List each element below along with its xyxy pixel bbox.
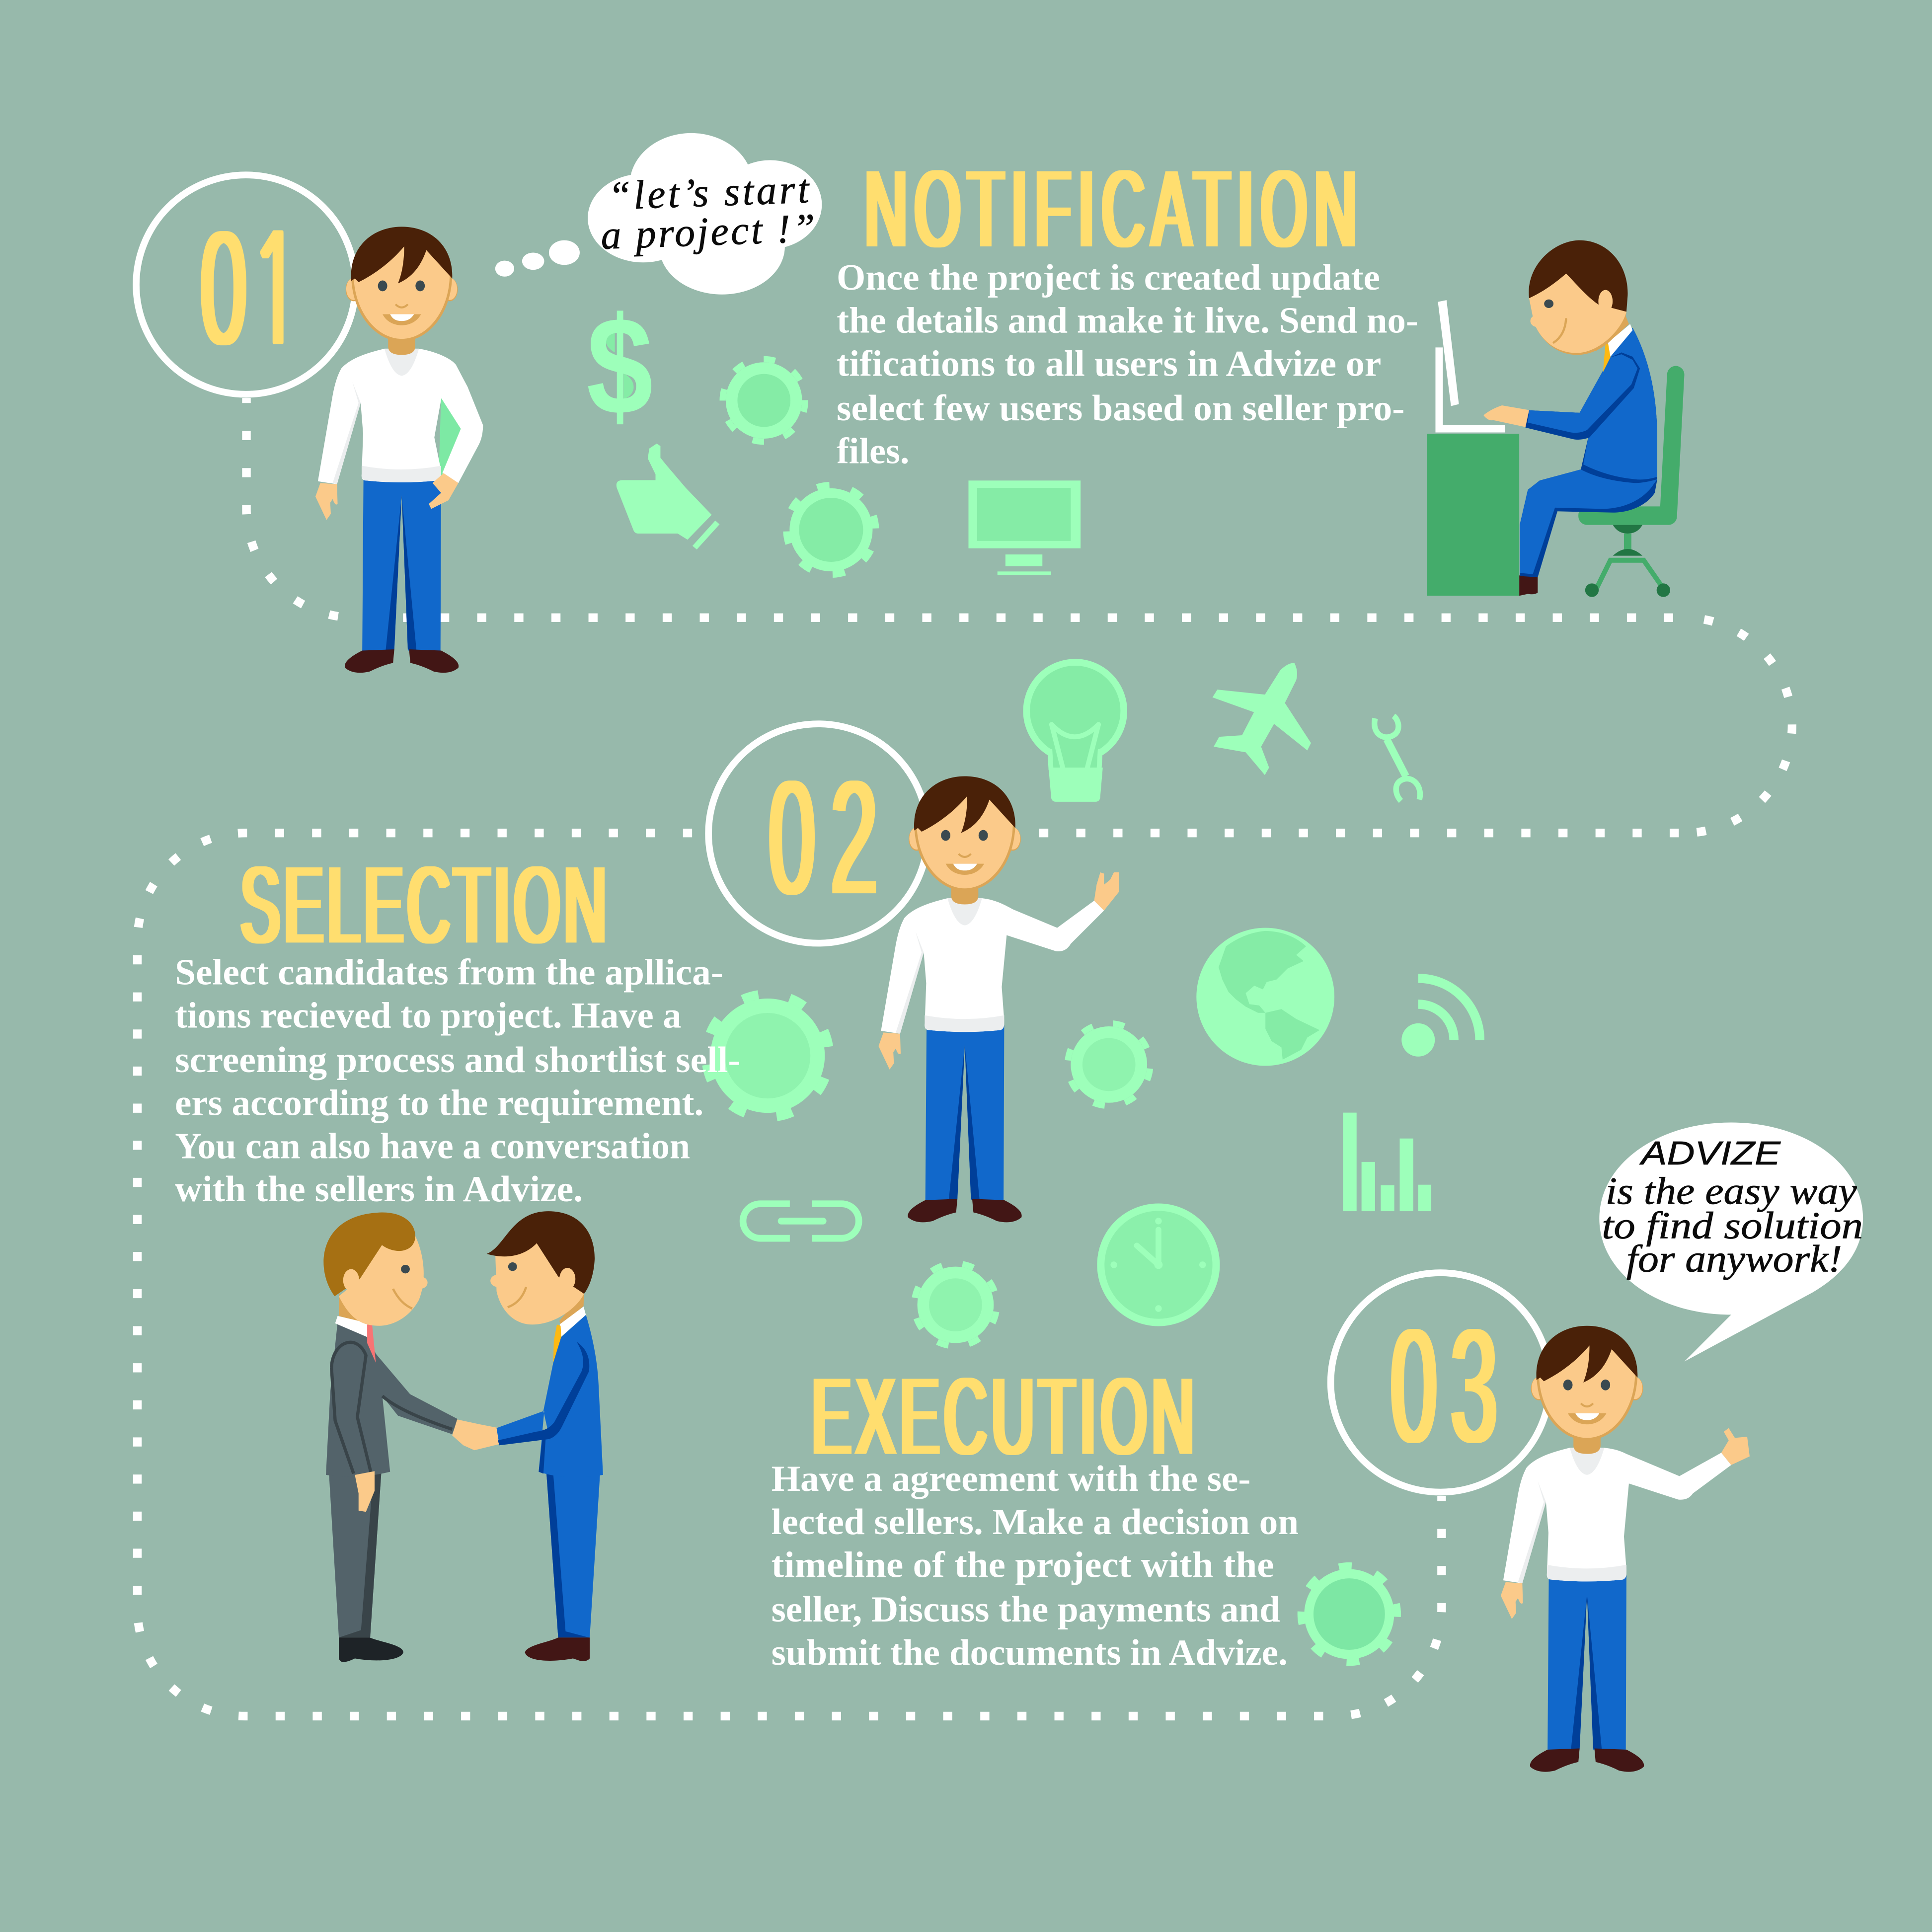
laptop	[1435, 300, 1505, 433]
blue man's neck	[559, 1291, 584, 1326]
collar	[1570, 1448, 1604, 1475]
icon: gear lower right	[1292, 1557, 1406, 1671]
text: execution body: submit the documents in Advize.	[772, 1632, 1288, 1673]
yellow tie	[553, 1324, 561, 1363]
icon: chain link	[743, 1204, 859, 1238]
right arm	[419, 349, 483, 483]
thought bubble	[495, 133, 822, 295]
balloon line 1: is the easy way	[1606, 1169, 1857, 1212]
speech bubble	[1599, 1122, 1863, 1362]
cloud quote second line: a project !”	[600, 205, 816, 258]
balloon	[1599, 1122, 1863, 1362]
icon: gear bottom	[908, 1257, 1004, 1353]
man in grey suit	[323, 1213, 458, 1662]
text: execution body: seller, Discuss the payments and	[772, 1589, 1280, 1630]
number 03: 03	[1391, 1296, 1497, 1476]
left hand	[315, 483, 338, 520]
text: selection body: ers according to the requirement.	[175, 1083, 703, 1124]
grey man's collar	[335, 1316, 369, 1338]
neck	[951, 880, 978, 904]
jeans shadow	[1571, 1594, 1602, 1750]
neck	[1573, 1429, 1601, 1454]
hand	[1483, 405, 1530, 428]
number 02: 02	[769, 748, 877, 927]
text: execution body: timeline of the project with the	[772, 1545, 1274, 1586]
left hand	[1501, 1582, 1523, 1619]
blue jacket	[497, 1314, 603, 1477]
shoes	[1530, 1748, 1644, 1772]
icon: clock	[1101, 1207, 1216, 1322]
icon: gear left large	[687, 975, 849, 1137]
shoes	[345, 649, 459, 673]
icon: light bulb	[1026, 662, 1124, 802]
black shoe	[339, 1637, 403, 1662]
neck	[1596, 311, 1629, 351]
grey trousers shadow	[339, 1473, 381, 1637]
grey man's smile	[393, 1289, 412, 1309]
eye	[1544, 300, 1553, 308]
cloud	[588, 133, 822, 295]
head	[909, 776, 1021, 891]
man in blue suit	[452, 1211, 603, 1661]
balloon line 3: for anywork!	[1626, 1237, 1842, 1280]
blue trousers	[546, 1473, 600, 1637]
blue jacket shading	[498, 1342, 589, 1473]
sweater shading	[896, 931, 1004, 1034]
jeans	[1547, 1575, 1626, 1750]
step circle 03	[1331, 1273, 1550, 1492]
icon: monitor	[968, 480, 1081, 575]
dark hair	[487, 1211, 595, 1294]
book under arm	[439, 397, 462, 475]
right hand	[429, 473, 459, 509]
text: notification body: files.	[837, 431, 909, 472]
text: selection body: with the sellers in Advize.	[175, 1169, 583, 1210]
brown hair	[323, 1213, 415, 1296]
step circle 01	[136, 175, 356, 394]
grey man's eye	[401, 1265, 410, 1273]
text: execution body	[772, 1459, 1299, 1673]
icon: gear top	[723, 359, 805, 442]
icon: airplane	[1213, 663, 1311, 775]
grey jacket shading	[331, 1342, 452, 1473]
desk	[1427, 434, 1519, 596]
sweater shading	[1518, 1481, 1626, 1583]
step circle 02	[708, 724, 928, 943]
sweater	[881, 898, 1013, 1034]
icon: gear middle	[775, 473, 887, 586]
blue man's collar	[560, 1307, 586, 1338]
grey man's lower hand	[355, 1471, 375, 1512]
raised arm	[1604, 1448, 1731, 1500]
text: selection body: You can also have a conversation	[175, 1126, 690, 1166]
text: notification body	[837, 257, 1418, 472]
ear	[1598, 290, 1613, 312]
brown shoe	[525, 1637, 590, 1661]
grey man's neck	[339, 1294, 385, 1324]
text: notification body: tifications to all users in Advize or	[837, 343, 1381, 384]
thought dots	[495, 240, 580, 277]
red tie	[367, 1324, 376, 1363]
icon: thumbs up	[617, 444, 719, 549]
collar	[1608, 324, 1632, 357]
trousers	[1520, 469, 1657, 577]
raised arm	[982, 898, 1104, 951]
character: man standing, step 01	[315, 227, 483, 673]
text: selection body: tions recieved to project. Have a	[175, 996, 682, 1036]
balloon heading: ADVIZE	[1639, 1135, 1781, 1172]
thumbs up hand	[1721, 1428, 1750, 1465]
icon: globe	[1196, 928, 1334, 1066]
sweater	[318, 349, 450, 484]
text: notification body: Once the project is created update	[837, 257, 1380, 298]
raised hand	[1094, 872, 1119, 911]
blue man's eye	[508, 1262, 517, 1271]
blue man's nose	[490, 1275, 505, 1287]
text: execution body: Have a agreement with the se-	[772, 1459, 1250, 1499]
smile	[1554, 319, 1566, 343]
icon: dollar sign: $	[587, 288, 653, 444]
icon: gear centre	[1064, 1019, 1155, 1110]
nose	[1530, 315, 1545, 327]
sweater	[1503, 1448, 1631, 1583]
blue man's smile	[508, 1287, 526, 1308]
character: man at desk	[1427, 240, 1677, 597]
heading: execution: EXECUTION	[812, 1356, 1194, 1477]
text: notification body: the details and make it live. Send no-	[837, 301, 1418, 341]
heading: selection: SELECTION	[240, 845, 607, 966]
character: man presenting, step 02	[878, 776, 1119, 1222]
shoe	[1519, 575, 1538, 596]
blue man's ear	[559, 1268, 575, 1290]
number 01: 01	[200, 198, 300, 378]
grey man's face	[339, 1236, 424, 1326]
grey trousers	[329, 1473, 381, 1637]
text: execution body: lected sellers. Make a decision on	[772, 1502, 1299, 1543]
cloud quote: “let’s start	[608, 166, 811, 219]
heading: notification: NOTIFICATION	[865, 148, 1357, 270]
character: man thumbs up, step 03	[1501, 1326, 1750, 1772]
head	[1531, 1326, 1643, 1440]
text: selection body: screening process and shortlist sell-	[175, 1040, 741, 1081]
grey jacket	[326, 1322, 458, 1477]
jeans shadow	[949, 1045, 980, 1200]
dotted path connecting the steps	[138, 398, 1792, 1716]
icon: wrench	[1375, 716, 1420, 801]
handshake hands	[452, 1419, 499, 1450]
jeans	[362, 475, 441, 651]
text: selection body: Select candidates from the apllica-	[175, 952, 723, 993]
jeans	[926, 1025, 1004, 1200]
balloon line 2: to find solution	[1602, 1204, 1863, 1247]
blue trousers shadow	[546, 1473, 589, 1637]
text: notification body: select few users based on seller pro-	[837, 388, 1404, 429]
grey man's ear	[343, 1269, 359, 1291]
tie	[1603, 344, 1611, 372]
arm	[1526, 352, 1640, 440]
hair	[1529, 240, 1627, 311]
characters: handshake	[323, 1211, 603, 1662]
sweater shading	[333, 382, 441, 484]
collar	[947, 898, 982, 926]
left hand	[878, 1032, 901, 1070]
neck	[388, 330, 415, 355]
chair	[1578, 375, 1677, 597]
icon: wifi	[1401, 978, 1480, 1057]
grey man's nose	[413, 1277, 428, 1289]
collar	[385, 349, 419, 376]
shoes	[908, 1199, 1022, 1222]
icon: bar chart	[1343, 1113, 1431, 1211]
blue man's face	[495, 1243, 584, 1324]
jacket	[1581, 328, 1657, 483]
head	[346, 227, 458, 341]
text: selection body	[175, 952, 741, 1210]
head	[1529, 298, 1626, 355]
jeans shadow	[386, 495, 416, 651]
